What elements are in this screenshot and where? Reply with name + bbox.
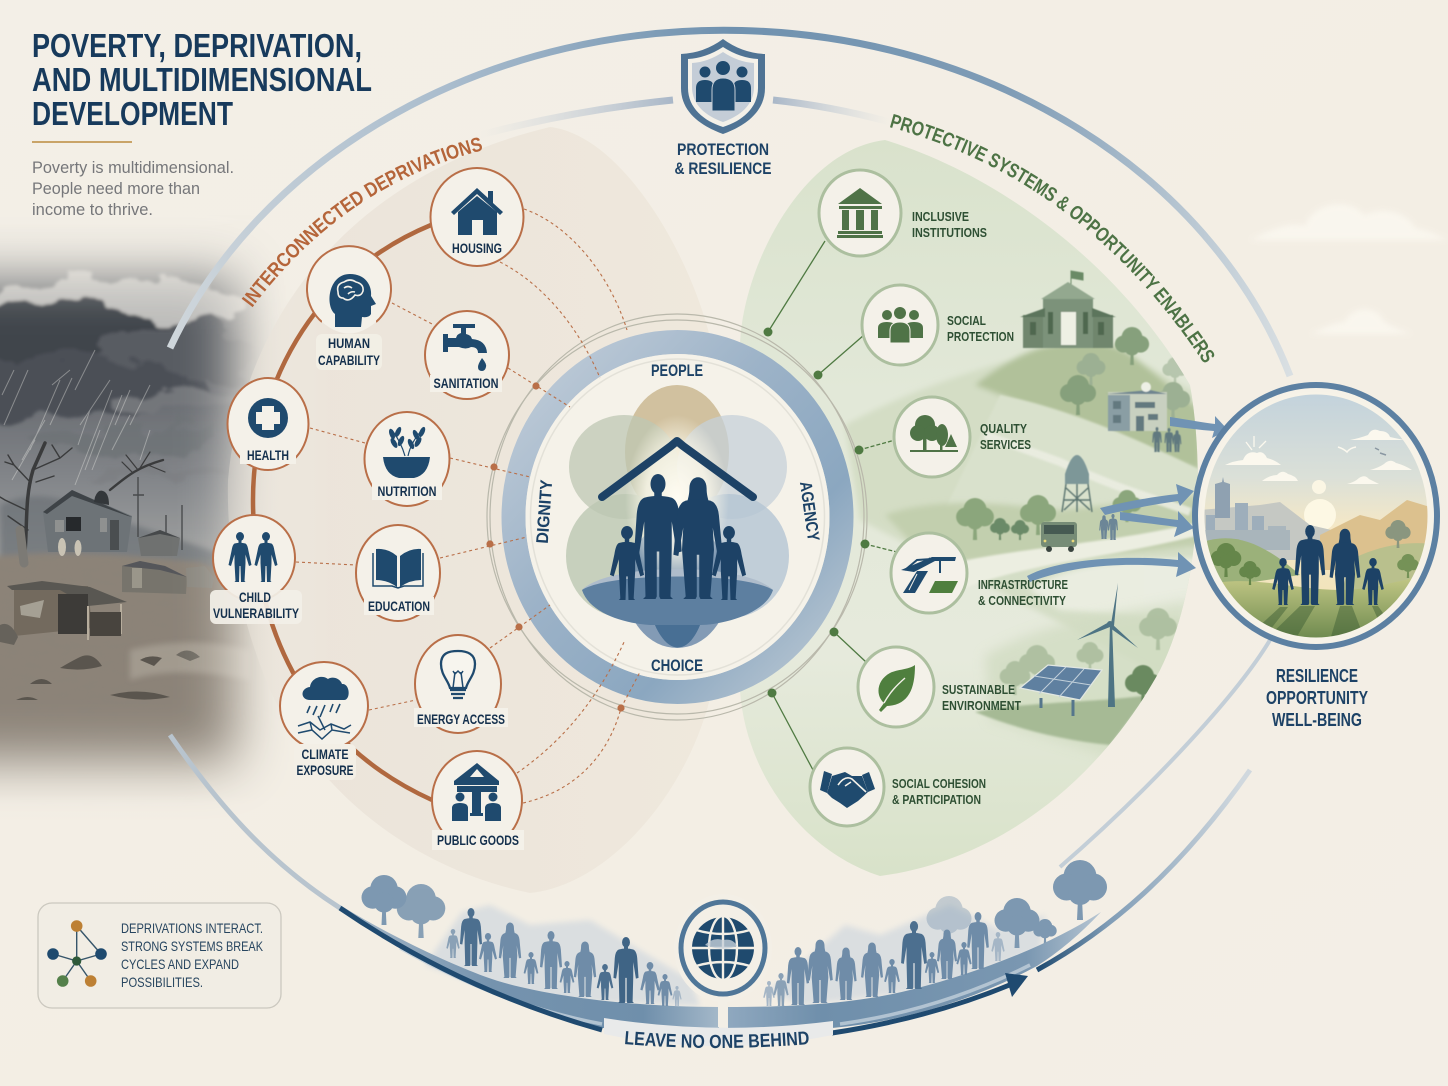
enabler: social protection [862,285,1014,365]
heading: protection and resilience: & RESILIENCE [674,159,772,178]
central circle: people, dignity, agency, choice [514,342,842,692]
subtitle: Poverty is multidimensional. [32,158,234,177]
hilltop government building [1020,271,1116,348]
heading: protection and resilience: PROTECTION [677,140,769,159]
water tower [1062,455,1092,512]
title [32,27,372,132]
node: health: HEALTH [247,447,289,463]
thin connector rings around centre [487,314,867,720]
enabler nodes [764,328,870,698]
enabler: social protection: PROTECTION [947,329,1014,344]
title: DEVELOPMENT [32,95,233,132]
outcome circle: resilience [1190,385,1440,650]
front tin hut [7,581,127,640]
city skyline [1200,477,1290,550]
section heading: protective systems: PROTECTIVE SYSTEMS & OPPORTUNITY ENABLERS [890,114,1214,362]
enabler: quality services: QUALITY [980,421,1027,436]
node: child vulnerability [210,515,302,624]
outcome label: WELL-BEING [1272,710,1362,730]
distant hills [0,495,213,568]
outcome label: RESILIENCE [1276,666,1358,686]
title underline [32,141,132,143]
legend callout [38,903,281,1008]
pathway arrows into the outcome circle [1027,416,1228,582]
network icon [47,920,107,987]
node: energy access [414,635,508,733]
banner [604,1018,833,1046]
landscape scene inside blob [845,342,1210,760]
green hills [1207,538,1300,582]
legend text: STRONG SYSTEMS BREAK [121,938,264,954]
title: POVERTY, DEPRIVATION, [32,27,362,64]
long shadows [1263,606,1383,636]
storm scene: poverty and climate hardship [0,241,274,797]
outer ring: upper arc [170,30,1290,376]
ground [0,552,241,784]
node: nutrition: NUTRITION [378,483,436,499]
enabler: social cohesion and participation: & PARTICIPATION [892,792,981,807]
enabler: social cohesion and participation [810,748,986,826]
pedestrians on the road [1099,514,1118,540]
solar panel [1020,665,1102,716]
node: health [228,378,308,470]
enabler: quality services: SERVICES [980,437,1031,452]
clinic building [1106,382,1181,452]
mountains [1204,502,1330,560]
enabler: inclusive institutions [819,170,987,256]
node: education [356,525,440,621]
legend text: POSSIBILITIES. [121,974,203,990]
node: child vulnerability: VULNERABILITY [213,605,300,621]
node: housing: HOUSING [452,240,502,256]
sun and clouds [1225,430,1412,531]
enabler: sustainable environment: ENVIRONMENT [942,698,1021,713]
legend text [121,920,264,990]
leave no one behind band [338,860,1107,1048]
node: climate exposure: EXPOSURE [296,762,354,778]
bus [1041,522,1077,552]
mountains [425,905,1045,1006]
protection arc segments [480,100,890,135]
label: agency: AGENCY [796,480,823,543]
title: AND MULTIDIMENSIONAL [32,61,372,98]
node: education: EDUCATION [368,598,430,614]
node: nutrition [364,412,450,506]
people left [446,908,682,1006]
trees of the landscape [956,327,1190,705]
node: energy access: ENERGY ACCESS [417,711,505,727]
globe icon [674,894,772,1002]
lower arcs of outer ring [170,640,1270,970]
enabler: inclusive institutions: INCLUSIVE [912,209,969,224]
enabler: inclusive institutions: INSTITUTIONS [912,225,987,240]
node: climate exposure: CLIMATE [302,746,348,762]
subtitle: income to thrive. [32,200,153,219]
banner label: LEAVE NO ONE BEHIND [625,1031,809,1048]
family silhouette [1272,525,1384,605]
node: child vulnerability: CHILD [239,589,271,605]
node: public goods: PUBLIC GOODS [437,832,519,848]
overlapping petals [566,385,789,648]
shield icon: protection [681,39,765,134]
node: housing [430,168,524,266]
dead tree right [110,452,165,490]
section heading: interconnected deprivations: INTERCONNECTED DEPRIVATIONS [242,138,482,308]
ground band [340,905,719,1028]
node: climate exposure [280,662,368,780]
legend text: CYCLES AND EXPAND [121,956,239,972]
enabler: quality services [894,397,1031,477]
enabler: sustainable environment [858,647,1021,727]
label: people: PEOPLE [651,361,703,380]
family silhouette [610,474,746,600]
storm clouds [0,270,246,458]
people right [763,912,1005,1006]
node: human capability: HUMAN [328,335,370,351]
enabler connectors [768,241,897,770]
subtitle [32,158,234,219]
outcome label [1266,666,1368,730]
connector nodes [486,382,625,712]
panel: protective systems blob [740,140,1210,876]
navy arc right with arrow [832,984,1012,1033]
legend text: DEPRIVATIONS INTERACT. [121,920,263,936]
enabler: infrastructure and connectivity: & CONNECTIVITY [978,593,1066,608]
subtitle: People need more than [32,179,200,198]
node: human capability: CAPABILITY [318,352,380,368]
community trees [362,860,1107,948]
deprivation chain arc [253,225,432,800]
node: sanitation [425,311,509,399]
dead tree left [0,443,72,563]
deprivation connectors [296,209,640,803]
enabler: infrastructure and connectivity: INFRASTRUCTURE [978,577,1068,592]
wind turbine [1077,583,1138,707]
band highlight [400,948,1030,1024]
background clouds at upper right [1250,204,1448,334]
node: human capability [307,246,391,370]
navy arc left [340,908,602,1030]
enabler: sustainable environment: SUSTAINABLE [942,682,1015,697]
main house [43,490,132,556]
node: sanitation: SANITATION [434,375,498,391]
utility poles [133,477,182,550]
far huts [122,530,186,594]
rocks and rubble [0,624,200,700]
rain streaks [2,350,150,485]
roof icon [602,441,753,497]
panel: interconnected deprivations blob [228,127,712,893]
label: choice: CHOICE [651,656,703,675]
arrowhead [1005,973,1028,997]
enabler: social protection: SOCIAL [947,313,986,328]
ground band right [728,912,1101,1028]
enabler: infrastructure and connectivity [891,533,1068,613]
label: dignity: DIGNITY [533,478,556,544]
heading: protection and resilience [674,140,772,178]
outcome label: OPPORTUNITY [1266,688,1368,708]
node: public goods [432,751,524,850]
enabler: social cohesion and participation: SOCIAL COHESION [892,776,986,791]
stem [718,985,727,1027]
